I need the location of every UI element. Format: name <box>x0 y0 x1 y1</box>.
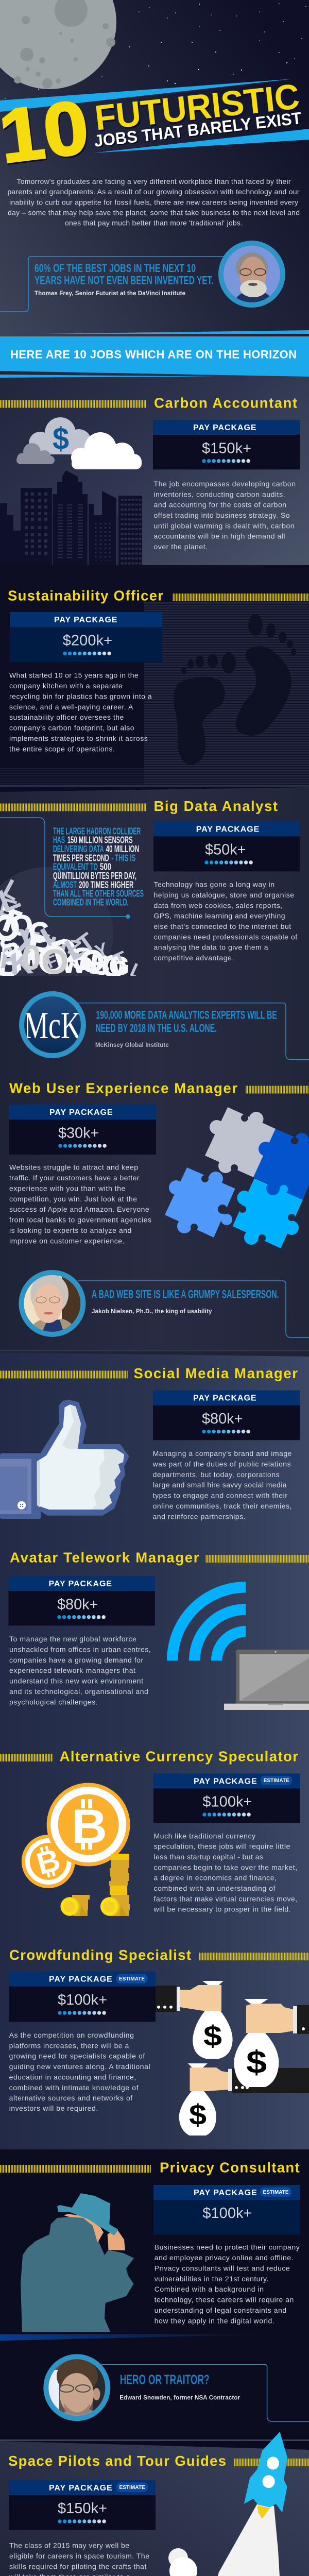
description: As the competition on crowdfunding <box>9 2031 134 2039</box>
panel: alternative currency speculator <box>0 1748 300 1916</box>
callout: large hadron collider: 40 MILLION <box>106 843 139 854</box>
description <box>9 2541 150 2576</box>
description: understanding of legal constraints and <box>154 2306 286 2314</box>
pay package box: ESTIMATE <box>119 2485 145 2490</box>
intro text: ones that pay much better than more 'traditional' jobs. <box>65 218 243 227</box>
description: from local banks to government agencies <box>9 1216 151 1224</box>
description <box>9 1635 151 1706</box>
pay package box: PAY PACKAGE <box>49 2484 112 2493</box>
pay package box: PAY PACKAGE <box>194 2189 257 2197</box>
callout: McKinsey statistic: NEED BY 2018 IN THE U.S. ALONE. <box>96 1022 217 1035</box>
callout: large hadron collider: TIMES PER SECOND <box>53 852 109 863</box>
callout: large hadron collider: THE LARGE HADRON COLLIDER <box>53 825 141 836</box>
description: and its technological, organisational and <box>9 1687 148 1696</box>
callout: large hadron collider: COMBINED IN THE WORLD. <box>53 897 129 908</box>
description <box>152 1449 292 1520</box>
panel: web user experience manager <box>9 1080 309 1337</box>
illustration: pile of letters: S <box>72 942 93 976</box>
callout: Jakob Nielsen quote: Jakob Nielsen, Ph.D., the king of usability <box>92 1309 212 1315</box>
callout: hero or traitor: HERO OR TRAITOR? <box>120 2372 210 2387</box>
pay package box: PAY PACKAGE <box>193 423 256 432</box>
illustration: pile of letters <box>0 867 138 976</box>
illustration: pile of letters: L <box>127 959 147 984</box>
description: Much like traditional currency <box>153 1832 255 1840</box>
callout: hero or traitor <box>101 2364 309 2421</box>
illustration: bitcoins and gold coins <box>22 1783 130 1916</box>
intro text: inability to curb our appetite for fossil fuels, there are new careers being invented every <box>9 198 298 206</box>
description: accountants will be in high demand all <box>153 532 285 540</box>
callout: large hadron collider: - THIS IS <box>111 852 135 863</box>
description: understand this new work environment <box>9 1676 143 1685</box>
description: science, and a well-paying career. A <box>9 703 133 711</box>
illustration: puzzle pieces <box>165 1107 309 1248</box>
description: and employee privacy online and offline. <box>154 2253 294 2262</box>
banner: here are 10 jobs: HERE ARE 10 JOBS WHICH ARE ON THE HORIZON <box>10 348 297 361</box>
description: recycling bin for plastics has grown into a <box>9 692 152 700</box>
panel: crowdfunding specialist <box>9 1947 309 2136</box>
pay package box: $200k+ <box>63 632 112 649</box>
pay package box: $100k+ <box>202 1794 252 1810</box>
description: To manage the new global workforce <box>9 1635 136 1643</box>
description: What started 10 or 15 years ago in the <box>9 671 139 680</box>
portrait: Jakob Nielsen <box>19 1270 85 1337</box>
accent wedge <box>0 2334 280 2341</box>
background: big data and web section <box>0 785 309 1350</box>
background: carbon accountant section <box>0 336 309 565</box>
description: else that's connected to the internet but <box>153 922 291 930</box>
pay package box <box>9 1972 156 2022</box>
illustration: pile of letters: F <box>44 951 60 972</box>
illustration: bitcoins and gold coins: B <box>33 1842 64 1882</box>
description: Websites struggle to attract and keep <box>9 1163 138 1172</box>
pay package box <box>153 420 300 469</box>
heading: Avatar Telework Manager <box>10 1549 199 1565</box>
background: privacy section <box>0 2149 309 2439</box>
description: speculation, these jobs will require little <box>153 1842 290 1851</box>
description: the entire scope of operations. <box>9 744 115 753</box>
description: competition, you win. Just look at the <box>9 1195 137 1203</box>
panel: carbon accountant <box>0 395 300 565</box>
illustration: figure in hat <box>21 2193 134 2332</box>
title: JOBS THAT BARELY EXIST <box>93 109 303 150</box>
banner: here are 10 jobs <box>0 330 309 378</box>
pay package box: $80k+ <box>202 1411 243 1427</box>
icon: McKinsey logo: McK <box>24 1005 81 1047</box>
description: Technology has gone a long way in <box>153 880 274 889</box>
title: FUTURISTIC <box>93 76 301 138</box>
illustration: pile of letters: V <box>15 923 44 956</box>
description: education in accounting and finance, <box>9 2073 136 2081</box>
description: Managing a company's brand and image <box>153 1449 292 1458</box>
description: traffic. If your customers have a better <box>9 1174 140 1182</box>
illustration: pile of letters: W <box>62 950 87 978</box>
description: companies begin to take over the market, <box>153 1863 297 1871</box>
illustration: pile of letters: D <box>112 956 128 979</box>
description: companies have a growing demand for <box>9 1656 144 1664</box>
description: types to engage and connect with their <box>153 1491 287 1499</box>
stars <box>5 3 306 99</box>
description: alternative sources and networks of <box>9 2094 132 2102</box>
pay package box: PAY PACKAGE <box>49 1108 113 1117</box>
icon: laptop <box>224 1650 309 1710</box>
description: until global warming is dealt with, carbon <box>153 521 295 530</box>
callout: large hadron collider: THAN ALL THE OTHER SOURCES <box>53 888 144 899</box>
pay package box: PAY PACKAGE <box>193 1394 256 1403</box>
illustration: rocket and smoke <box>156 2432 309 2576</box>
description: less than startup capital - but as <box>153 1853 263 1861</box>
description: psychological challenges. <box>9 1698 98 1706</box>
description: competitive advantage. <box>153 954 234 962</box>
callout: large hadron collider <box>0 818 144 919</box>
background: intro section <box>0 0 309 336</box>
portrait: Thomas Frey <box>218 241 285 309</box>
panel: privacy consultant <box>0 2160 309 2421</box>
description: offset trading into business strategy. So <box>153 511 290 519</box>
description: company kitchen with a separate <box>9 682 123 690</box>
pay package box <box>153 1773 300 1823</box>
illustration: pile of letters: O <box>10 909 33 941</box>
illustration: pile of letters: D <box>47 929 82 973</box>
description: is looking to experts to analyze and <box>9 1226 131 1234</box>
description: and reinforce partnerships. <box>153 1512 246 1520</box>
description: improve on customer experience. <box>9 1236 125 1245</box>
description: eligible for careers in space tourism. The <box>9 2552 149 2560</box>
pay package box: ESTIMATE <box>263 2190 289 2195</box>
description: Businesses need to protect their company <box>154 2243 300 2251</box>
heading: Crowdfunding Specialist <box>9 1947 191 1963</box>
description: how they apply in the digital world. <box>154 2316 274 2325</box>
heading: Big Data Analyst <box>153 798 278 814</box>
pay package box: $30k+ <box>58 1125 99 1141</box>
callout: large hadron collider: 500 <box>100 861 111 872</box>
description: implements strategies to shrink it across <box>9 734 148 742</box>
heading: Social Media Manager <box>134 1365 298 1381</box>
description: combined with an understanding of <box>153 1884 276 1892</box>
illustration: pile of letters: M <box>12 942 40 977</box>
illustration: hands with money bags: $ <box>189 2098 207 2131</box>
callout: large hadron collider: QUINTILLION BYTES PER DAY, <box>53 870 136 881</box>
callout: McKinsey statistic: McKinsey Global Institute <box>95 1042 169 1048</box>
pay package box: $50k+ <box>205 842 246 858</box>
illustration: pile of letters: O <box>41 942 68 981</box>
icon: wifi signal <box>173 1587 246 1660</box>
illustration: pile of letters: Y <box>92 938 111 962</box>
icon: moon <box>0 0 116 89</box>
description: sustainability officer oversees the <box>9 713 124 721</box>
background: sustainability officer section <box>0 565 309 785</box>
heading: Privacy Consultant <box>160 2160 300 2176</box>
background: social, avatar, currency, crowdfunding section <box>0 1350 309 2149</box>
description: and accounting for the costs of carbon <box>153 501 286 509</box>
illustration: pile of letters: T <box>72 928 100 959</box>
description: Combined with a background in <box>154 2285 264 2293</box>
callout: Jakob Nielsen quote <box>78 1281 309 1337</box>
description: large and small hire savvy social media <box>153 1481 287 1489</box>
illustration: hands with money bags <box>156 1981 309 2136</box>
description: success of Apple and Amazon. Everyone <box>9 1205 149 1213</box>
illustration: pile of letters: G <box>109 952 129 980</box>
description <box>9 1163 151 1245</box>
pay package box <box>153 1391 300 1440</box>
intro text <box>7 177 300 227</box>
panel: avatar telework manager <box>8 1549 309 1710</box>
illustration: pile of letters: O <box>35 937 71 984</box>
illustration: hands with money bags: $ <box>246 2045 267 2080</box>
intro text: day – some that may help save the planet, some that take business to the next level and <box>8 208 300 216</box>
panel: social media manager <box>0 1365 300 1520</box>
icon: McKinsey logo <box>19 991 86 1058</box>
callout: Thomas Frey quote: YEARS HAVE NOT EVEN BEEN INVENTED YET. <box>35 274 213 287</box>
illustration: pile of letters: Z <box>66 936 83 960</box>
illustration: hands with money bags: $ <box>203 2020 222 2052</box>
illustration: pile of letters: 0 <box>22 938 41 977</box>
intro text: parents and grandparents. As a result of our growing obsession with technology and our <box>7 188 300 196</box>
description: The job encompasses developing carbon <box>153 480 296 488</box>
background: space section <box>0 2439 309 2576</box>
heading: Alternative Currency Speculator <box>60 1748 298 1764</box>
description: a degree in economics and finance, <box>153 1874 277 1882</box>
description: company's carbon footprint, but also <box>9 723 134 732</box>
callout: large hadron collider: DELIVERING DATA <box>53 843 104 854</box>
panel: big data analyst <box>0 798 309 1060</box>
pay package box: PAY PACKAGE <box>49 1975 112 1984</box>
illustration: pile of letters: Q <box>99 947 128 986</box>
pay package box <box>9 1105 156 1155</box>
description <box>154 2243 300 2325</box>
callout: Thomas Frey quote: 60% OF THE BEST JOBS IN THE NEXT 10 <box>35 262 196 275</box>
pay package box: PAY PACKAGE <box>196 825 260 834</box>
illustration: pile of letters: O <box>78 942 107 980</box>
description: The class of 2015 may very well be <box>9 2541 129 2550</box>
illustration: pile of letters: R <box>23 926 58 972</box>
callout: large hadron collider: HAS <box>53 835 65 845</box>
heading: Web User Experience Manager <box>9 1080 237 1096</box>
pay package box: PAY PACKAGE <box>194 1777 257 1786</box>
pay package box: $100k+ <box>58 1992 107 2008</box>
panel: sustainability officer <box>8 588 309 765</box>
illustration: pile of letters: L <box>60 929 91 967</box>
callout: large hadron collider: 200 TIMES HIGHER <box>79 879 133 890</box>
description: technology, these careers will require an <box>154 2296 294 2304</box>
callout: hero or traitor: Edward Snowden, former NSA Contractor <box>119 2395 241 2401</box>
description: investors will be required. <box>9 2104 98 2112</box>
description <box>9 2031 150 2112</box>
illustration: pile of letters: B <box>88 947 112 981</box>
pay package box: PAY PACKAGE <box>54 616 117 624</box>
illustration: pile of letters: X <box>12 921 43 965</box>
illustration: pile of letters: H <box>45 931 71 963</box>
pay package box <box>9 2480 156 2530</box>
description: online communities, track their enemies, <box>153 1502 291 1510</box>
illustration: clouds with dollar <box>16 417 142 469</box>
description: departments, but today, corporations <box>153 1470 280 1479</box>
description: will be necessary to prosper in the field. <box>153 1905 290 1913</box>
description: combined with intimate knowledge of <box>9 2083 139 2092</box>
description: unshackled from offices in urban centres, <box>9 1645 151 1653</box>
heading: Space Pilots and Tour Guides <box>8 2453 226 2469</box>
pay package box: ESTIMATE <box>264 1778 289 1784</box>
callout: Thomas Frey quote <box>0 257 224 312</box>
callout: large hadron collider: EQUIVALENT TO <box>53 861 98 872</box>
description: analysing the data to give them a <box>153 943 268 952</box>
description: Privacy consultants will test and reduce <box>154 2264 290 2272</box>
pay package box <box>153 821 300 871</box>
pay package box <box>10 612 162 662</box>
pay package box: $150k+ <box>202 440 251 456</box>
description: over the planet. <box>153 543 208 551</box>
description: factors that make virtual currencies move, <box>153 1894 297 1903</box>
illustration: bitcoins and gold coins: B <box>72 1799 107 1853</box>
description: experience with you than with the <box>9 1184 126 1192</box>
description: data from web cookies, sales reports, <box>153 901 282 909</box>
callout: McKinsey statistic <box>78 1003 309 1060</box>
description <box>9 671 152 753</box>
description: guiding new ventures along. A traditional <box>9 2062 150 2071</box>
description: GPS, machine learning and everything <box>153 912 285 920</box>
illustration: clouds with dollar: $ <box>53 421 69 456</box>
intro text: Tomorrow's graduates are facing a very different workplace than that faced by their <box>16 177 291 185</box>
heading: Carbon Accountant <box>154 395 297 411</box>
heading: Sustainability Officer <box>8 588 163 604</box>
description <box>153 880 297 962</box>
description: helping us catalogue, store and organise <box>153 891 294 899</box>
pay package box <box>8 1576 155 1625</box>
pay package box: $80k+ <box>57 1596 98 1613</box>
description: companies need professionals capable of <box>153 933 297 941</box>
callout: Thomas Frey quote: Thomas Frey, Senior Futurist at the DaVinci Institute <box>35 291 185 297</box>
description: skills required for piloting the crafts that <box>9 2562 147 2570</box>
panel: space pilots and tour guides <box>8 2432 309 2576</box>
illustration: pile of letters: L <box>35 915 71 957</box>
pay package box: $100k+ <box>202 2205 252 2222</box>
description: growing need for specialists capable of <box>9 2052 145 2060</box>
callout: large hadron collider: 150 MILLION SENSORS <box>67 835 133 845</box>
illustration: pile of letters: U <box>1 941 21 971</box>
description: was part of the duties of public relations <box>152 1460 291 1468</box>
description: platforms increases, there will be a <box>9 2041 129 2049</box>
pay package box <box>153 2185 300 2235</box>
illustration: pile of letters: K <box>8 943 35 982</box>
description: vulnerabilities in the 21st century. <box>154 2275 268 2283</box>
description: inventories, conducting carbon audits, <box>153 490 285 498</box>
description: experienced telework managers that <box>9 1666 135 1674</box>
illustration: footprints <box>174 614 296 765</box>
title <box>0 76 309 179</box>
description <box>153 1832 297 1913</box>
illustration: city skyline <box>0 470 142 565</box>
pay package box: PAY PACKAGE <box>48 1580 112 1588</box>
illustration: pile of letters: C <box>26 915 52 950</box>
illustration: thumbs up <box>0 1400 129 1519</box>
callout: large hadron collider: ALMOST <box>53 879 77 890</box>
pay package box: ESTIMATE <box>119 1976 145 1982</box>
description <box>153 480 296 551</box>
illustration: pile of letters: T <box>110 947 131 973</box>
portrait: Edward Snowden <box>43 2354 110 2421</box>
pay package box: $150k+ <box>58 2500 107 2517</box>
